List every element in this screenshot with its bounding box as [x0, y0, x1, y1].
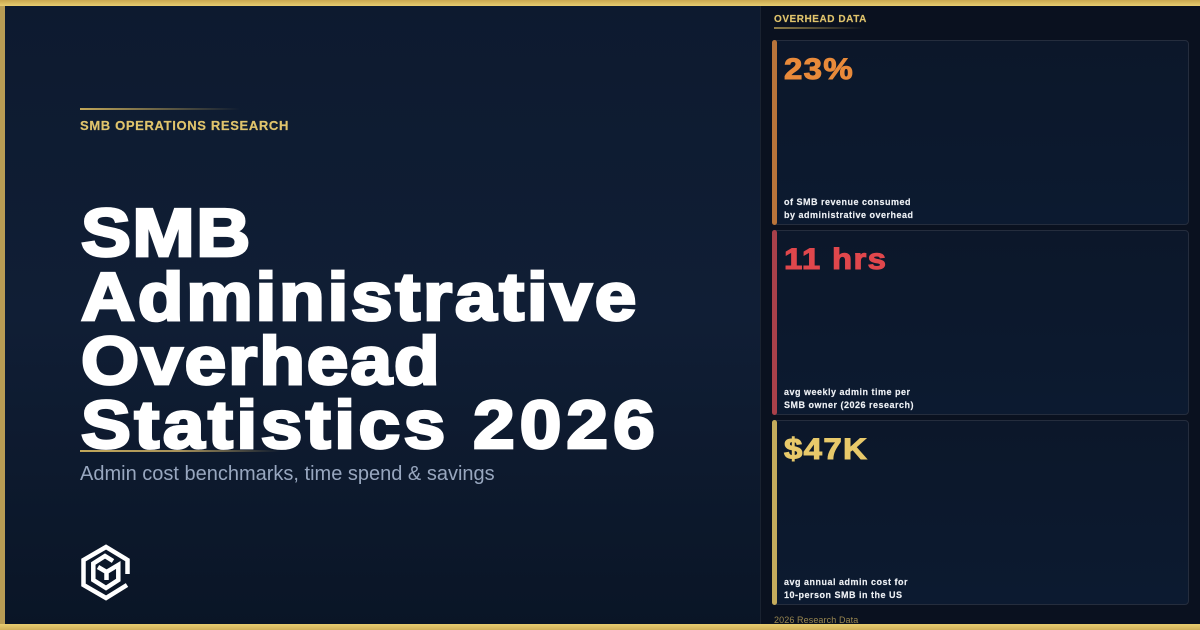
stat number 3: $47K	[784, 433, 868, 466]
background panel	[0, 0, 760, 630]
stat label 1	[784, 197, 914, 220]
panel: stat card 2	[772, 230, 1189, 415]
title	[80, 195, 660, 463]
icon: hexagon logo	[81, 544, 130, 601]
stat label 3: 10-person SMB in the US	[784, 590, 903, 600]
eyebrow rule	[80, 108, 240, 110]
stat label 1: by administrative overhead	[784, 210, 914, 220]
right column panel	[760, 0, 1200, 630]
title: Statistics 2026	[81, 387, 660, 463]
title: Administrative	[81, 259, 639, 335]
panel: stat card 3	[772, 420, 1189, 605]
panel: stat card 1	[772, 40, 1189, 225]
stat number 2: 11 hrs	[784, 243, 887, 276]
stat number 1: 23%	[784, 53, 854, 86]
stat label 3	[784, 577, 908, 600]
subtitle: Admin cost benchmarks, time spend & savings	[80, 463, 495, 485]
title: Overhead	[81, 323, 441, 399]
stat label 2: avg weekly admin time per	[784, 387, 911, 397]
stat label 2	[784, 387, 914, 410]
bottom gold border	[0, 624, 1200, 630]
stat label 1: of SMB revenue consumed	[784, 197, 911, 207]
stat label 2: SMB owner (2026 research)	[784, 400, 914, 410]
right heading rule	[774, 27, 864, 29]
stat label 3: avg annual admin cost for	[784, 577, 908, 587]
footer note: 2026 Research Data	[774, 615, 858, 625]
left gold border	[0, 6, 5, 624]
right heading: OVERHEAD DATA	[774, 14, 867, 25]
title rule	[80, 450, 280, 452]
top gold border	[0, 0, 1200, 6]
title: SMB	[81, 195, 252, 271]
eyebrow text: SMB OPERATIONS RESEARCH	[80, 118, 289, 133]
